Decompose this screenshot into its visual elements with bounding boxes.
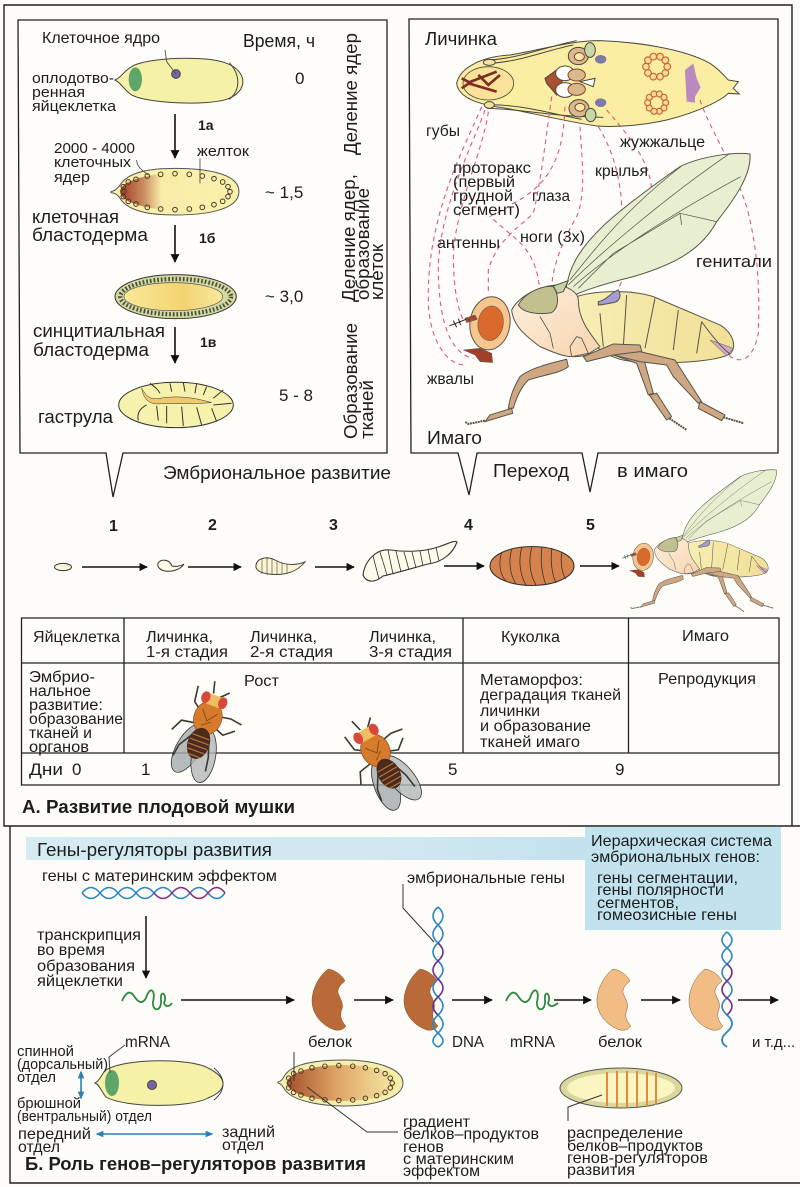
diagram: blastoderm with gradient	[278, 1052, 403, 1132]
arrow	[82, 566, 147, 568]
arrow	[641, 999, 680, 1001]
label 1b: 1б	[199, 230, 216, 246]
arrow	[738, 999, 778, 1001]
metamorphosis text: Метаморфоз:	[480, 672, 583, 689]
days row: 9	[615, 760, 624, 779]
days row: 5	[448, 760, 457, 779]
label: fertilized egg	[32, 70, 117, 115]
label: lips: губы	[426, 123, 460, 140]
label: distribution: развития	[567, 1162, 635, 1179]
stage headings: Эмбриональное развитие	[163, 463, 391, 483]
panel: larva to imago	[409, 19, 778, 495]
arrow	[444, 565, 484, 567]
time value 0: 0	[295, 69, 304, 88]
dashed lines connecting larval discs to adult structures	[428, 97, 759, 365]
label: ventral: брюшной	[17, 1095, 81, 1112]
label: transcription: транскрипция	[37, 927, 141, 944]
arrow 1v	[174, 327, 176, 363]
arrow: anterior-posterior axis	[97, 1133, 212, 1135]
label: dorsal: (дорсальный)	[17, 1056, 108, 1073]
blue box: hierarchy: Иерархическая система	[591, 833, 772, 850]
label: gradient	[403, 1114, 539, 1180]
label: haltere: жужжальце	[620, 134, 705, 151]
arrow	[354, 999, 393, 1001]
label: gastrula: гаструла	[38, 407, 114, 427]
label: cellular blastoderm: бластодерма	[32, 225, 149, 245]
stage headings: Переход	[493, 461, 570, 481]
heading: time, hours: Время, ч	[243, 31, 315, 51]
outer frame, part B	[10, 826, 800, 1183]
embryonic development cell text: органов	[29, 739, 89, 756]
stage headings: в имаго	[617, 461, 688, 481]
larva stage 2	[256, 557, 305, 575]
label: transcription: во время	[37, 942, 105, 959]
time value 3.0: ~ 3,0	[265, 287, 303, 306]
label: antennae: антенны	[437, 235, 500, 252]
embryonic development cell text: развитие:	[29, 697, 103, 714]
DNA helix: embryonic genes	[433, 907, 443, 1047]
header row text: Яйцеклетка	[33, 629, 120, 646]
egg	[54, 563, 72, 571]
metamorphosis text: тканей имаго	[480, 734, 580, 751]
label: maternal effect genes: гены с материнским эффектом	[42, 868, 277, 885]
heading: section A: А. Развитие плодовой мушки	[22, 797, 295, 817]
reproduction text: Репродукция	[658, 671, 756, 688]
label: dorsal: отдел	[17, 1069, 56, 1086]
label: syncytial blastoderm	[33, 321, 165, 360]
outer frame, part A	[4, 5, 800, 826]
label: gradient: градиент	[403, 1114, 471, 1131]
label: prothorax: сегмент)	[453, 202, 520, 219]
label: embryonic genes: эмбриональные гены	[407, 870, 565, 887]
label: anterior	[18, 1126, 91, 1156]
blue box: hierarchy	[585, 827, 781, 930]
growth text: Рост	[244, 673, 279, 690]
vertical label: nuclear division: Деление ядер	[341, 33, 361, 155]
days row: Дни	[29, 760, 63, 779]
diagram: egg with mRNA	[95, 1045, 223, 1105]
diagram: syncytial blastoderm	[115, 275, 236, 319]
molecule labels: белок	[598, 1034, 643, 1051]
label: cellular blastoderm: клеточная	[32, 207, 119, 227]
label: legs: ноги (3х)	[520, 229, 585, 246]
label 1a: 1а	[198, 117, 214, 133]
time value 5-8: 5 - 8	[279, 386, 313, 405]
label: prothorax	[453, 160, 531, 219]
metamorphosis text: личинки	[480, 703, 540, 720]
heading: section B: Б. Роль генов–регуляторов развития	[25, 1154, 366, 1174]
header row text: Имаго	[682, 628, 729, 645]
label: fertilized egg: оплодотво-	[32, 70, 114, 87]
label: distribution: генов-регуляторов	[567, 1150, 708, 1167]
diagram: egg with stripes	[560, 1068, 682, 1121]
icon: fruit fly 1	[157, 673, 252, 791]
header row text: 3-я стадия	[369, 644, 452, 661]
label: 2000-4000 nuclei	[54, 140, 135, 186]
label: posterior: задний	[222, 1124, 275, 1141]
label: anterior: передний	[18, 1126, 91, 1143]
time value 1.5: ~ 1,5	[265, 183, 303, 202]
label: syncytial blastoderm: бластодерма	[33, 340, 150, 360]
heading: imago: Имаго	[427, 428, 482, 448]
label: prothorax: проторакс	[453, 160, 531, 177]
larva stage 1	[158, 560, 184, 571]
label: posterior	[222, 1124, 275, 1154]
stage numbers: 5	[586, 517, 595, 534]
days row: 0	[72, 760, 81, 779]
label: posterior: отдел	[222, 1137, 264, 1154]
molecule labels: белок	[308, 1034, 353, 1051]
label: transcription: образования	[37, 958, 135, 975]
label: 2000-4000 nuclei: ядер	[54, 169, 90, 186]
label: gradient: эффектом	[403, 1163, 480, 1180]
vertical label: nuclear division and cell formation: Деление ядер,	[339, 174, 359, 302]
leader line	[403, 884, 434, 942]
stage numbers: 1	[109, 518, 118, 535]
days row	[29, 760, 624, 779]
vertical label: tissue formation	[341, 323, 377, 439]
protein light bound to DNA	[689, 969, 723, 1030]
diagram: larva with imaginal discs	[457, 41, 739, 126]
arrow	[188, 566, 241, 568]
molecule labels: и т.д...	[752, 1034, 795, 1051]
label: fertilized egg: яйцеклетка	[32, 98, 117, 115]
stage numbers: 2	[208, 517, 217, 534]
molecule labels: mRNA	[510, 1034, 555, 1051]
blue box: hierarchy: гены полярности	[597, 882, 724, 899]
panel outline with callout pointer	[18, 20, 387, 497]
protein dark bound to DNA	[404, 969, 438, 1030]
label: yolk: желток	[197, 143, 249, 160]
embryonic development cell text: нальное	[29, 683, 91, 700]
arrow: dorsal-ventral axis	[80, 1072, 82, 1098]
arrow	[554, 999, 591, 1001]
diagram: adult fly	[449, 153, 750, 430]
heading: regulatory genes: Гены-регуляторы развития	[37, 840, 272, 860]
label 1v: 1в	[200, 334, 217, 350]
panel: embryonic development	[18, 20, 387, 497]
label: dorsal: спинной	[17, 1043, 74, 1060]
label: mandibles: жвалы	[427, 371, 474, 388]
label: gradient: с материнским	[403, 1151, 514, 1168]
label: cellular blastoderm	[32, 207, 149, 245]
embryonic development cell text	[29, 669, 123, 756]
label: 2000-4000 nuclei: клеточных	[54, 154, 132, 171]
label: fertilized egg: ренная	[32, 84, 85, 101]
header row text: Личинка,	[146, 629, 213, 646]
label: dorsal	[17, 1043, 108, 1086]
header row text: 1-я стадия	[146, 644, 228, 661]
molecule labels: DNA	[452, 1034, 484, 1051]
header row text: Куколка	[501, 629, 560, 646]
section B: blue heading band	[26, 837, 585, 860]
label: 2000-4000 nuclei: 2000 - 4000	[54, 140, 135, 157]
label: syncytial blastoderm: синцитиальная	[33, 321, 165, 341]
vertical label: tissue formation: тканей	[357, 380, 377, 439]
stage headings	[163, 461, 688, 483]
metamorphosis text: и образование	[480, 718, 591, 735]
adult fly in life cycle	[622, 470, 777, 612]
label: distribution	[567, 1125, 708, 1179]
mRNA squiggle 2	[506, 990, 558, 1009]
DNA helix: maternal genes	[82, 888, 225, 898]
molecule labels	[125, 1034, 795, 1051]
blue box: hierarchy: эмбриональных генов:	[591, 849, 760, 866]
blue box: hierarchy: сегментов,	[597, 895, 679, 912]
icon: fruit fly 2	[331, 701, 438, 822]
arrow 1b	[174, 225, 176, 262]
header row text	[33, 628, 729, 661]
table grid	[22, 618, 779, 785]
metamorphosis text: деградация тканей	[480, 687, 621, 704]
days row: 1	[141, 760, 150, 779]
metamorphosis text	[480, 672, 621, 751]
label: distribution: распределение	[567, 1125, 683, 1142]
label: transcription	[37, 927, 141, 990]
stage numbers: 3	[329, 517, 338, 534]
diagram: fertilized egg	[115, 50, 243, 103]
pupa	[490, 546, 574, 586]
label: gradient: генов	[403, 1139, 444, 1156]
panel outline with callout pointers	[409, 19, 778, 495]
diagram: gastrula	[119, 382, 233, 428]
label: eyes: глаза	[532, 188, 570, 205]
embryonic development cell text: образование	[29, 711, 123, 728]
molecule labels: mRNA	[125, 1034, 170, 1051]
label: prothorax: грудной	[453, 188, 513, 205]
blue box: hierarchy: гены сегментации,	[597, 870, 738, 887]
embryonic development cell text: Эмбрио-	[29, 669, 95, 686]
arrow to protein	[181, 999, 294, 1001]
larva stage 3	[363, 541, 457, 581]
life cycle sequence	[54, 541, 619, 586]
mRNA squiggle	[122, 990, 172, 1009]
heading: larva: Личинка	[425, 29, 498, 49]
label: transcription: яйцеклетки	[37, 973, 123, 990]
label: anterior: отдел	[18, 1139, 60, 1156]
header row text: 2-я стадия	[250, 644, 333, 661]
label: distribution: белков–продуктов	[567, 1138, 703, 1155]
arrow	[315, 566, 354, 568]
label: cell nucleus: Клеточное ядро	[42, 30, 160, 47]
label: ventral	[17, 1095, 152, 1125]
stage numbers	[109, 517, 595, 535]
vertical label: nuclear division and cell formation: клеток	[367, 244, 387, 300]
DNA helix: second	[722, 932, 732, 1047]
arrow	[580, 565, 619, 567]
protein light	[597, 969, 631, 1030]
header row text: Личинка,	[369, 629, 436, 646]
embryonic development cell text: тканей и	[29, 725, 92, 742]
arrow 1a	[174, 114, 176, 158]
label: wings: крылья	[595, 163, 648, 180]
label: gradient: белков–продуктов	[403, 1126, 539, 1143]
arrow	[452, 999, 492, 1001]
arrow: transcription	[145, 916, 147, 978]
vertical label: tissue formation: Образование	[341, 323, 361, 439]
label: prothorax: (первый	[453, 174, 515, 191]
vertical label: nuclear division and cell formation	[339, 174, 387, 302]
protein dark	[312, 969, 346, 1030]
label: genitalia: генитали	[696, 253, 772, 271]
header row text: Личинка,	[250, 629, 317, 646]
stage numbers: 4	[464, 517, 473, 534]
table: developmental stages	[22, 618, 779, 785]
blue box: hierarchy: гомеозисные гены	[597, 907, 737, 924]
label: ventral: (вентральный) отдел	[17, 1108, 152, 1125]
vertical label: nuclear division and cell formation: образование	[353, 188, 373, 300]
diagram: cellular blastoderm	[111, 158, 239, 215]
